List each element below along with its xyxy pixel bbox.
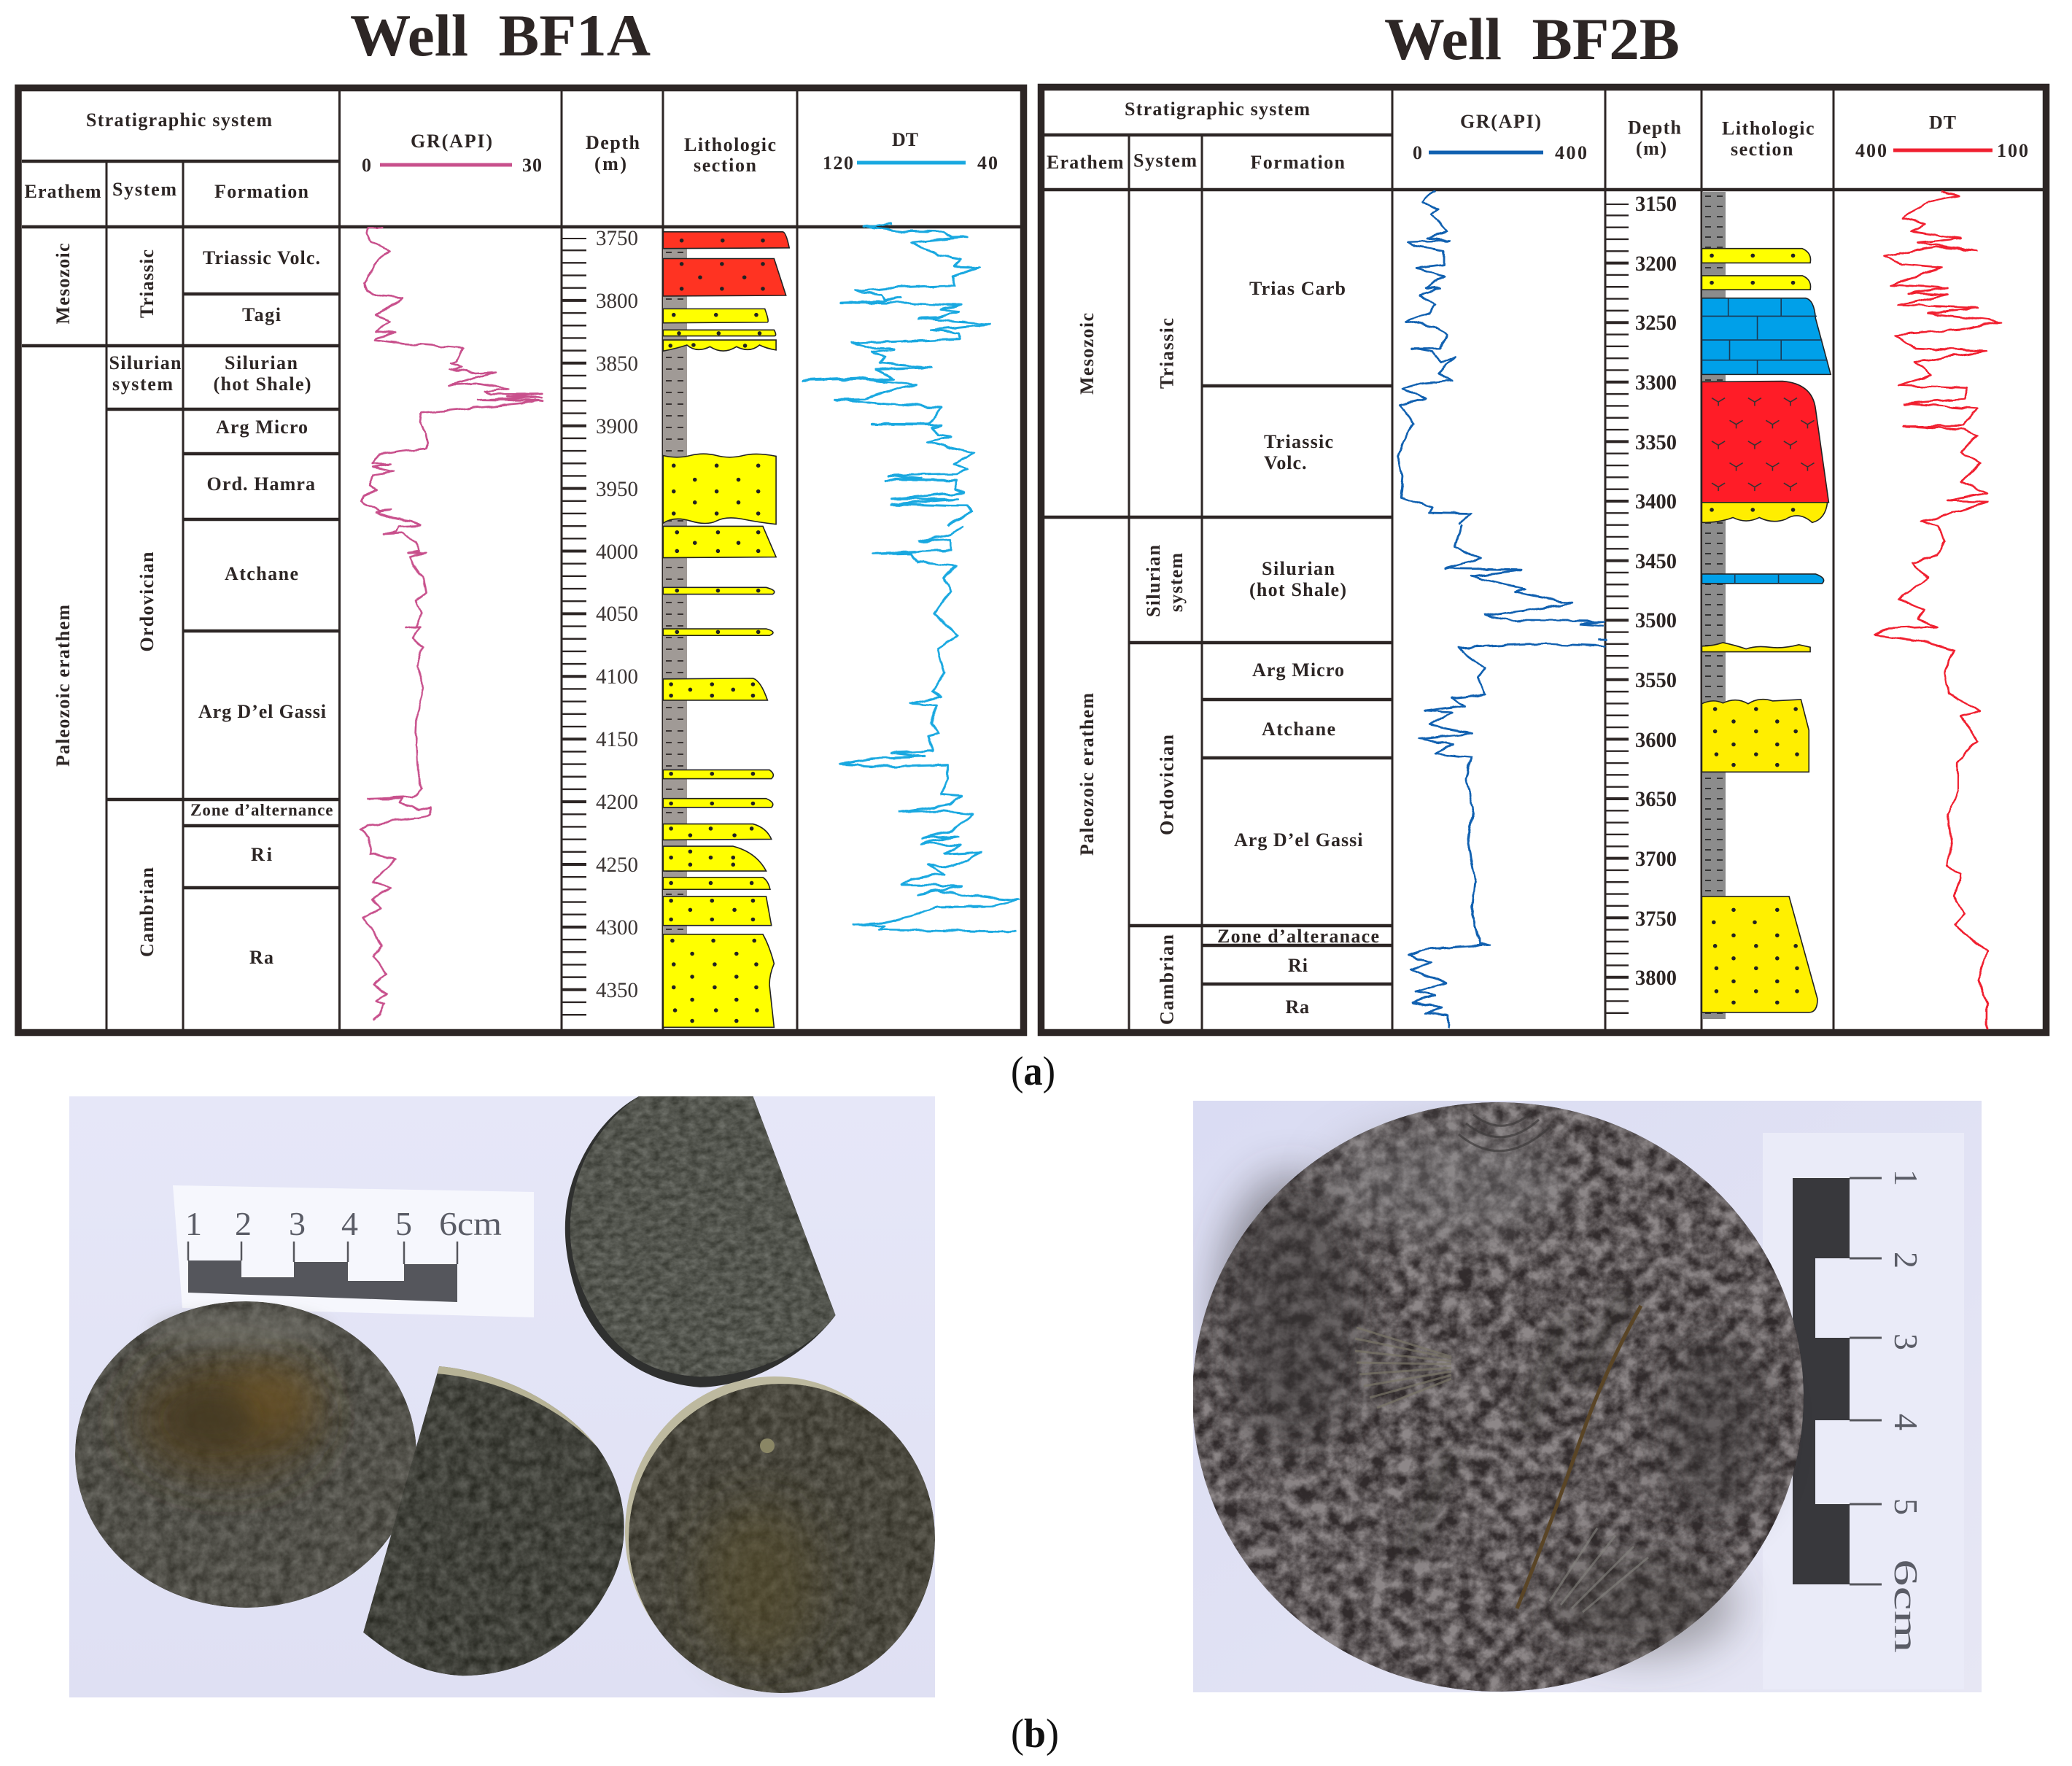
depth axis BF2B: 3700 bbox=[1635, 847, 1677, 871]
vertical scale strip with ruler bbox=[1763, 1133, 1964, 1689]
fossil core disk bbox=[1192, 1102, 1804, 1692]
stratigraphic labels BF1A: Ra bbox=[249, 947, 273, 968]
stratigraphic labels BF2B: Trias Carb bbox=[1249, 278, 1346, 299]
stratigraphic labels BF1A: Arg Micro bbox=[216, 417, 308, 438]
DT curve BF2B bbox=[1875, 192, 2001, 1029]
stratigraphic labels BF2B: Cambrian bbox=[1157, 934, 1177, 1025]
depth axis BF2B: 3650 bbox=[1635, 787, 1677, 811]
depth axis BF2B: 3250 bbox=[1635, 311, 1677, 335]
limestone bed with bricks bbox=[1702, 298, 1831, 374]
stratigraphic labels BF1A: Ordovician bbox=[136, 551, 158, 652]
column headers BF2B: Lithologic bbox=[1722, 118, 1815, 139]
column headers BF2B: (m) bbox=[1636, 138, 1666, 159]
core piece: lower right disk bbox=[625, 1376, 935, 1693]
shale background column bbox=[1702, 192, 1726, 1019]
vertical scale strip with ruler: 6cm bbox=[1887, 1559, 1925, 1653]
GR legend BF1A: 30 bbox=[522, 155, 542, 176]
column headers BF1A: (m) bbox=[594, 153, 626, 174]
stratigraphic labels BF1A: Silurian bbox=[225, 352, 298, 373]
fossil fans and crack bbox=[1355, 1112, 1648, 1612]
scale card with ruler: 1 bbox=[185, 1205, 202, 1242]
column headers BF1A bbox=[25, 109, 776, 202]
stratigraphic labels BF1A: Silurian bbox=[109, 352, 182, 373]
scale card with ruler: 6cm bbox=[439, 1205, 502, 1242]
scale card with ruler bbox=[173, 1185, 534, 1317]
column headers BF1A: System bbox=[112, 179, 176, 200]
stratigraphic labels BF1A: (hot Shale) bbox=[213, 373, 311, 395]
depth axis BF1A: 3950 bbox=[596, 477, 638, 501]
GR legend BF2B: 0 bbox=[1413, 142, 1422, 163]
photo background bbox=[1193, 1101, 1982, 1692]
DT legend BF2B bbox=[1855, 112, 2028, 161]
stratigraphic labels BF1A: Atchane bbox=[225, 563, 298, 584]
DT legend BF2B: 100 bbox=[1997, 140, 2028, 161]
photo: four shale core pieces with scale bbox=[69, 1096, 935, 1697]
vertical scale strip with ruler: 3 bbox=[1887, 1333, 1925, 1350]
stratigraphic labels BF2B: Arg Micro bbox=[1252, 659, 1344, 681]
column headers BF2B bbox=[1047, 98, 1815, 173]
depth axis BF1A: 3800 bbox=[596, 289, 638, 313]
vertical scale strip with ruler: 4 bbox=[1887, 1414, 1925, 1430]
GR curve BF1A bbox=[360, 228, 543, 1021]
depth axis BF1A: 4150 bbox=[596, 727, 638, 751]
DT legend BF2B: 400 bbox=[1855, 140, 1887, 161]
stratigraphic labels BF2B bbox=[1076, 278, 1379, 1025]
GR legend BF1A: GR(API) bbox=[411, 131, 492, 152]
stratigraphic labels BF2B: Ordovician bbox=[1157, 734, 1177, 835]
column headers BF2B: Depth bbox=[1628, 117, 1682, 139]
lithologic column BF1A bbox=[663, 232, 789, 1027]
column headers BF2B: Formation bbox=[1250, 152, 1346, 173]
stratigraphic labels BF2B: (hot Shale) bbox=[1249, 579, 1346, 600]
depth axis BF2B: 3350 bbox=[1635, 430, 1677, 454]
depth axis BF2B: 3550 bbox=[1635, 668, 1677, 692]
column headers BF1A: section bbox=[694, 155, 757, 176]
depth axis BF1A bbox=[574, 226, 638, 1017]
stratigraphic labels BF1A: Paleozoic erathem bbox=[53, 605, 74, 767]
depth axis BF1A: 4100 bbox=[596, 665, 638, 689]
scale card with ruler: 2 bbox=[235, 1205, 252, 1242]
stratigraphic labels BF1A: Arg D’el Gassi bbox=[198, 701, 326, 722]
stratigraphic labels BF1A: Tagi bbox=[242, 304, 281, 325]
depth axis BF2B bbox=[1617, 192, 1677, 1015]
column headers BF2B: System bbox=[1133, 150, 1197, 171]
depth axis BF2B: 3300 bbox=[1635, 371, 1677, 395]
stratigraphic labels BF2B: Volc. bbox=[1264, 452, 1307, 473]
depth axis BF2B: 3500 bbox=[1635, 608, 1677, 632]
DT curve BF1A bbox=[802, 224, 1018, 932]
scale card with ruler: 3 bbox=[289, 1205, 306, 1242]
depth axis BF1A: 4050 bbox=[596, 602, 638, 626]
sandstone beds upper bbox=[663, 309, 776, 524]
panel: well BF1A log table bbox=[18, 88, 1024, 1033]
DT legend BF1A: 120 bbox=[823, 152, 853, 174]
column headers BF1A: Stratigraphic system bbox=[86, 109, 272, 131]
column headers BF2B: Stratigraphic system bbox=[1125, 98, 1310, 120]
vertical scale strip with ruler: 2 bbox=[1887, 1252, 1925, 1269]
depth axis BF2B: 3400 bbox=[1635, 489, 1677, 514]
stratigraphic labels BF1A: Triassic Volc. bbox=[203, 247, 320, 268]
panel: well BF2B log table bbox=[1041, 88, 2046, 1033]
table grid BF2B bbox=[1041, 88, 2046, 1033]
depth axis BF1A: 4300 bbox=[596, 915, 638, 940]
stratigraphic labels BF2B: Triassic bbox=[1157, 318, 1177, 389]
stratigraphic labels BF2B: Arg D’el Gassi bbox=[1234, 829, 1362, 851]
stratigraphic labels BF2B: Mesozoic bbox=[1076, 313, 1098, 395]
volcanic red beds bbox=[663, 232, 789, 296]
wavy sandstone under volcanics bbox=[1702, 503, 1828, 522]
sandstone beds upper bbox=[1702, 249, 1811, 290]
lower beds bbox=[1702, 574, 1824, 1012]
stratigraphic labels BF1A bbox=[53, 244, 333, 968]
stratigraphic labels BF2B: Silurian bbox=[1262, 558, 1335, 579]
core piece: upper half disk bbox=[565, 1096, 836, 1387]
column headers BF2B: Erathem bbox=[1047, 152, 1124, 173]
stratigraphic labels BF2B: Silurian bbox=[1143, 544, 1164, 617]
stratigraphic labels BF1A: Mesozoic bbox=[53, 244, 74, 324]
column headers BF1A: Lithologic bbox=[684, 134, 776, 155]
depth axis BF2B: 3150 bbox=[1635, 192, 1677, 216]
vertical scale strip with ruler: 1 bbox=[1887, 1169, 1925, 1186]
stratigraphic labels BF2B: Atchane bbox=[1262, 719, 1335, 740]
depth axis BF1A: 3900 bbox=[596, 414, 638, 438]
volcanic red bed with Y marks bbox=[1702, 382, 1828, 503]
vertical scale strip with ruler: 5 bbox=[1887, 1498, 1925, 1515]
stratigraphic labels BF1A: system bbox=[112, 373, 173, 395]
depth axis BF1A: 4200 bbox=[596, 790, 638, 814]
GR legend BF1A bbox=[362, 131, 542, 176]
photo: single core disk with brachiopod fossils and scale bbox=[1192, 1101, 1982, 1692]
scale card with ruler: 4 bbox=[341, 1205, 358, 1242]
DT legend BF1A bbox=[823, 129, 998, 174]
stratigraphic labels BF1A: Ri bbox=[251, 844, 272, 865]
column headers BF1A: Formation bbox=[214, 181, 309, 202]
depth axis BF1A: 4250 bbox=[596, 853, 638, 877]
sandstone beds lower bbox=[663, 526, 776, 1027]
stratigraphic labels BF2B: Ri bbox=[1288, 955, 1308, 976]
scale card with ruler: 5 bbox=[395, 1205, 412, 1242]
GR legend BF2B bbox=[1413, 111, 1587, 163]
stratigraphic labels BF2B: system bbox=[1165, 553, 1187, 612]
depth axis BF1A: 3850 bbox=[596, 352, 638, 376]
stratigraphic labels BF2B: Triassic bbox=[1264, 431, 1333, 452]
table grid BF1A bbox=[18, 88, 1024, 1033]
lithologic column BF2B bbox=[1702, 192, 1831, 1019]
core piece: middle half disk bbox=[363, 1366, 624, 1676]
stratigraphic labels BF2B: Ra bbox=[1285, 996, 1309, 1018]
GR legend BF2B: 400 bbox=[1555, 142, 1587, 163]
DT legend BF1A: 40 bbox=[977, 152, 998, 174]
DT legend BF1A: DT bbox=[892, 129, 918, 150]
core piece: round disk with brown patch bbox=[75, 1301, 416, 1608]
depth axis BF2B: 3800 bbox=[1635, 966, 1677, 990]
stratigraphic labels BF1A: Zone d’alternance bbox=[190, 801, 333, 819]
shale background column bbox=[663, 248, 687, 934]
stratigraphic labels BF2B: Zone d’alteranace bbox=[1217, 926, 1379, 947]
stratigraphic labels BF1A: Ord. Hamra bbox=[207, 473, 315, 495]
column headers BF2B: section bbox=[1731, 139, 1793, 160]
depth axis BF2B: 3600 bbox=[1635, 728, 1677, 752]
caption (a): (a) bbox=[1011, 1049, 1055, 1094]
column headers BF1A: Erathem bbox=[25, 181, 101, 202]
stratigraphic labels BF1A: Triassic bbox=[136, 249, 158, 318]
depth axis BF1A: 4000 bbox=[596, 540, 638, 564]
photo background bbox=[69, 1096, 935, 1697]
depth axis BF2B: 3450 bbox=[1635, 549, 1677, 573]
DT legend BF2B: DT bbox=[1929, 112, 1956, 133]
column headers BF1A: Depth bbox=[586, 132, 640, 153]
title: Well BF2B: Well BF2B bbox=[1384, 6, 1680, 72]
stratigraphic labels BF1A: Cambrian bbox=[136, 867, 158, 957]
GR curve BF2B bbox=[1398, 192, 1605, 1029]
caption (b): (b) bbox=[1011, 1711, 1059, 1757]
stratigraphic labels BF2B: Paleozoic erathem bbox=[1076, 693, 1098, 856]
title: Well BF1A: Well BF1A bbox=[350, 2, 651, 69]
depth axis BF2B: 3200 bbox=[1635, 252, 1677, 276]
GR legend BF1A: 0 bbox=[362, 155, 371, 176]
depth axis BF1A: 3750 bbox=[596, 226, 638, 250]
GR legend BF2B: GR(API) bbox=[1460, 111, 1541, 132]
depth axis BF1A: 4350 bbox=[596, 978, 638, 1002]
depth axis BF2B: 3750 bbox=[1635, 907, 1677, 931]
core piece: middle half disk rim bbox=[438, 1366, 598, 1447]
